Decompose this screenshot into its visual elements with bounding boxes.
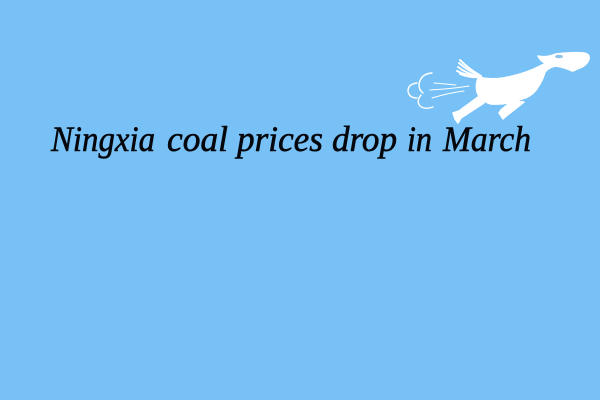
title: Ningxia [50, 119, 155, 159]
title: March [442, 119, 531, 159]
horse body and head [476, 53, 589, 104]
icon: running white horse with dust puff [408, 53, 589, 123]
horse tail [457, 60, 481, 77]
horse eye [555, 55, 563, 58]
horse front leg [499, 101, 524, 119]
title: prices [234, 119, 323, 159]
dust puff [408, 73, 433, 108]
title: drop [332, 119, 397, 159]
speed lines [430, 83, 469, 98]
title: coal [167, 119, 228, 159]
horse back leg [453, 97, 484, 123]
title: in [407, 119, 432, 159]
